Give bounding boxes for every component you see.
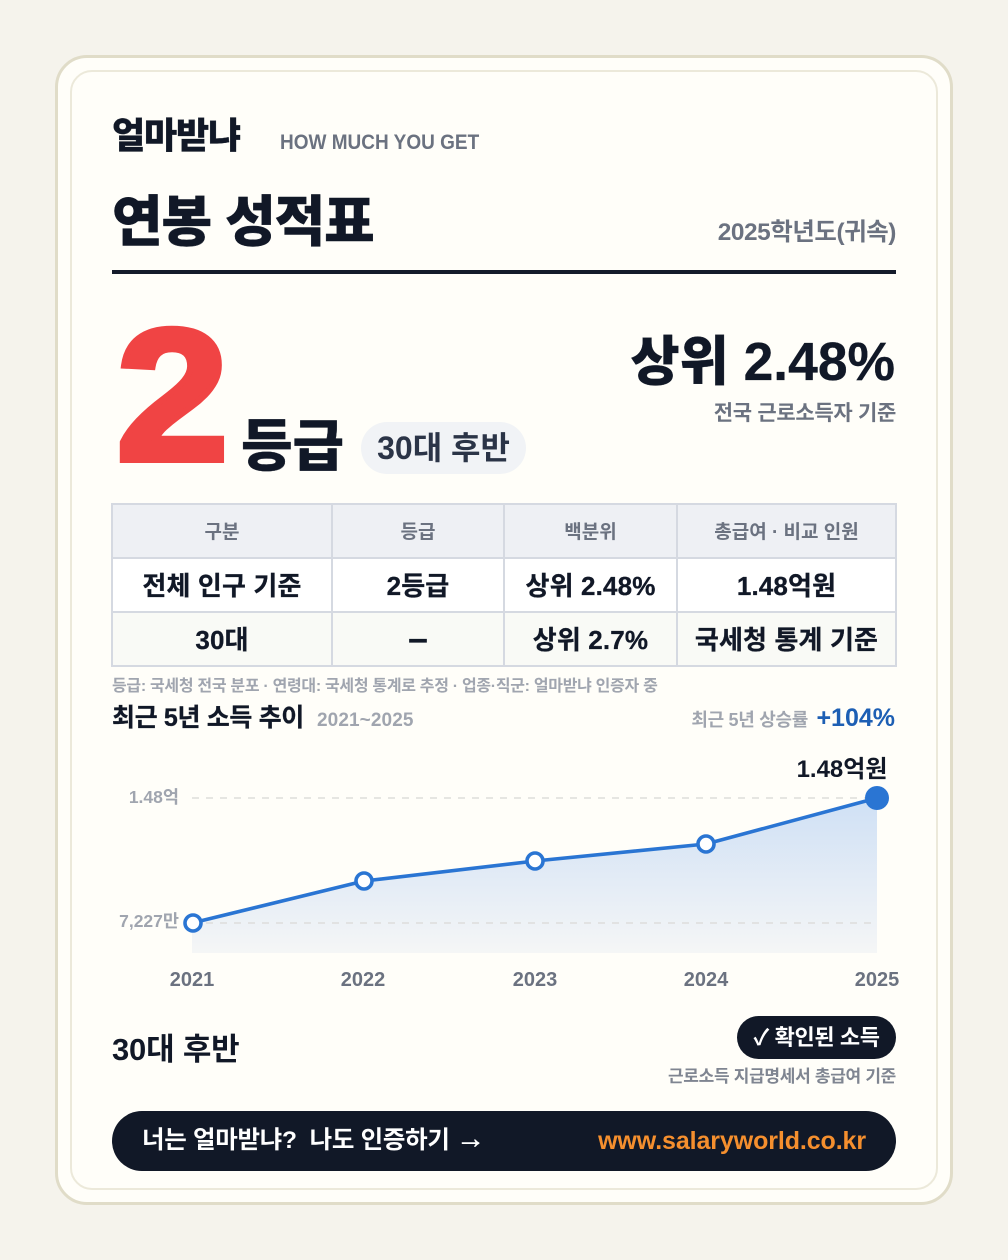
age group label: 30대 후반: [112, 1032, 239, 1067]
chart heading: 최근 5년 소득 추이: [112, 704, 304, 732]
table row: thirties: 30대: [195, 625, 249, 655]
big grade number: 2: [116, 290, 229, 500]
school year label: 2025학년도(귀속): [718, 219, 896, 246]
main title: 연봉 성적표: [112, 191, 374, 253]
table header row: [113, 505, 895, 557]
table row: thirties: 국세청 통계 기준: [695, 625, 878, 655]
table row: overall: 상위 2.48%: [526, 571, 656, 601]
table header row: 등급: [401, 522, 435, 543]
percentile basis: 전국 근로소득자 기준: [714, 402, 896, 425]
y axis labels: 1.48억: [129, 787, 179, 807]
table header row: 백분위: [564, 522, 617, 543]
brand name: 얼마받냐: [112, 115, 240, 156]
table header row: 구분: [205, 522, 239, 543]
table row: thirties: 상위 2.7%: [533, 625, 648, 655]
x axis labels: 2022: [341, 969, 385, 991]
x axis labels: 2025: [855, 969, 899, 991]
growth value: +104%: [816, 704, 895, 732]
area fill: [192, 798, 877, 953]
y axis labels: [119, 787, 179, 931]
trend line: [192, 798, 877, 923]
growth label: 최근 5년 상승률: [691, 710, 808, 730]
chart period: 2021~2025: [317, 710, 414, 731]
table header row: 총급여 · 비교 인원: [714, 522, 859, 543]
data points: [185, 836, 714, 931]
x axis labels: [170, 969, 899, 991]
percentile: 상위 2.48%: [631, 333, 895, 392]
verified badge: [737, 1016, 896, 1059]
call to action text: 너는 얼마받냐? 나도 인증하기 →: [142, 1123, 485, 1155]
comparison table: [111, 503, 897, 667]
x axis labels: 2023: [513, 969, 557, 991]
call to action bar: [112, 1111, 896, 1171]
header rule: [112, 270, 896, 274]
x axis labels: 2021: [170, 969, 214, 991]
table row: overall: [113, 559, 895, 611]
table row: thirties: –: [408, 618, 428, 658]
age badge: 30대 후반: [377, 430, 510, 466]
table footnote: 등급: 국세청 전국 분포 · 연령대: 국세청 통계로 추정 · 업종·직군: 얼마받냐 인증자 중: [112, 678, 658, 695]
y axis labels: 7,227만: [119, 911, 179, 931]
table row: overall: 전체 인구 기준: [142, 571, 302, 601]
table row: thirties: [113, 613, 895, 665]
final data point: [865, 786, 889, 810]
table row: overall: 2등급: [387, 571, 449, 601]
inner card: [70, 70, 938, 1190]
website url: www.salaryworld.co.kr: [598, 1127, 866, 1155]
verified badge: ✓ 확인된 소득: [753, 1025, 880, 1050]
x axis labels: 2024: [684, 969, 729, 991]
grade unit: 등급: [241, 415, 344, 478]
final value label: 1.48억원: [797, 756, 887, 783]
verified basis note: 근로소득 지급명세서 총급여 기준: [668, 1067, 896, 1086]
table row: overall: 1.48억원: [737, 571, 836, 601]
line chart: [119, 756, 899, 991]
age badge: [361, 422, 526, 474]
brand subtitle: HOW MUCH YOU GET: [280, 131, 479, 154]
